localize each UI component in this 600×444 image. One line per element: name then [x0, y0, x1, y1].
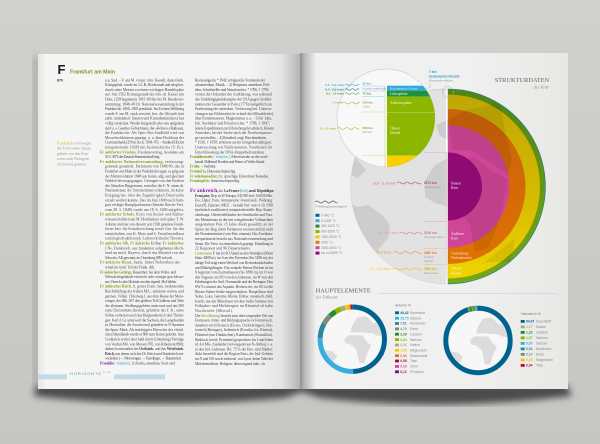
- velocity: inner core: 6371 km: [424, 181, 437, 185]
- text column 1: gen. Karl d. Gr. unterwarf die Sachsen, die Langobarden: [105, 318, 184, 323]
- temperature legend: 600-1500 °C: [321, 230, 340, 234]
- text column 2: ge verschollen. – 4) Rosalind, engl. Biochemikerin,: [195, 136, 267, 141]
- layer: transition zone: [387, 156, 418, 167]
- text column 1: schaft im mittl. Teil der Fränk. Alb.: [105, 266, 155, 270]
- text column 2: Frankoph'ie, französischsprachig.: [190, 179, 240, 183]
- text column 1: vom 28. 3. 1849) wurde am 18. 6. 1849 aufgelöst.: [105, 208, 184, 212]
- text column 2: den Vogesen, im NO von den Ardennen, im W von den: [195, 275, 273, 280]
- text column 2: Senat. Die Verw. ist zentralistisch geprägt. Einteilung in: [195, 242, 273, 246]
- velocity: transition: 2850 km: [424, 267, 437, 271]
- callout: oceanic crust marker: [418, 70, 460, 98]
- margin note: gebiets von den Fran-: [57, 152, 90, 156]
- text column 2: der Premierminister (vom Präs. ernannt). Das Zweikam-: [195, 232, 274, 236]
- text column 2: und Mittelgebirgen. Das zentrale Pariser Becken ist im: [195, 266, 273, 270]
- earth ring labels: Äußerer: [451, 231, 465, 236]
- footer bar: Horizonte: A – G: [103, 370, 110, 374]
- velocity labels upper layers: 3 km/s: [333, 101, 342, 105]
- temperature legend: 3500-4000 °C: [321, 246, 342, 250]
- legend: Anteil: 1,94: [400, 348, 407, 352]
- text column 2: Die Bevölkerung besteht zum überwiegenden Teil aus: [195, 314, 274, 318]
- text column 2: Mittelmeerküste. Religion: überwiegend kath., da: [195, 362, 265, 367]
- velocity labels upper layers: 35 km: [362, 82, 372, 86]
- text column 2: tannien der Gesandter in Paris (1776) maßgeblich zur: [195, 102, 273, 106]
- legend: Anteil: Chlor: [410, 365, 419, 369]
- text column 2: Baskisch (westl. Pyrenäen) gesprochen. Im Land leben: [195, 338, 273, 342]
- layer: continental crust: [387, 86, 427, 91]
- text column 1: Einigung bes. über die Zugehörigkeit Österreichs: [105, 192, 184, 198]
- text column 1: erzielt werden konnte. Das im Juni 1849 nach Stutt-: [105, 198, 185, 202]
- text column 2: Franklinstraße [ˈfræŋklɪn-], Meeresstraße an der nord-: [190, 155, 269, 160]
- velocity labels upper layers: 100 km: [362, 101, 373, 105]
- text column 2: leitete Expeditionen zur Erforschung der arktisch. Küsten: [195, 126, 274, 130]
- legend: Anteil: Titan: [410, 359, 417, 363]
- text column 1: Fr ankfurter Nationalversammlung, verfassung-: [100, 160, 185, 164]
- text column 1: Frankfurt am Main in der Paulskirche tagte; es ging aus: [105, 170, 184, 174]
- velocity: lower mantle: Unterer: [424, 255, 434, 259]
- earth ring labels: Kern: [451, 186, 458, 190]
- legend: Anteil: Magnesium: [410, 348, 427, 352]
- temperature legend: 0-1000 °C: [321, 219, 337, 223]
- right page: [300, 53, 568, 389]
- velocity: lower mantle: Mantel: [424, 259, 433, 263]
- text column 1: Paulskirche; 1866–1945 preußisch. Im Zweiten Weltkrieg: [105, 107, 184, 111]
- text column 2: Frühjahrs- und Herbstregen; im Rhonetal oft kalte: [195, 304, 273, 308]
- legend: Anteil: 49,42: [400, 311, 409, 315]
- left page: [38, 54, 300, 389]
- text column 1: die Span. Mark. Als mächtigster Herrscher des christl.: [105, 328, 184, 332]
- text column 2: Fr äske → Sachsfest.: [190, 165, 216, 169]
- magnifier circle: upper layers: Mantel: [390, 131, 400, 135]
- text column 2: Entschlüsselung der DNA-Doppelhelixstruktur.: [195, 150, 265, 154]
- legend: Anteil: 0,58: [400, 359, 407, 363]
- text column 1: Söhne eroberten auch das Burgunderreich und Thürin-: [105, 314, 185, 318]
- velocity labels upper layers: 8 - 13 km/s: [321, 126, 336, 130]
- earth ring labels: Gutenberg-: [451, 251, 470, 256]
- velocity labels upper layers: Mantel: [362, 130, 372, 134]
- margin note: zosen auch Hexagone: [57, 157, 90, 161]
- text column 1: german. Völker. Chlodwig I. aus dem Hause der Mero-: [105, 294, 185, 298]
- text column 1: soziologisch-philosoph. Lehren (kritische Theorie).: [105, 237, 184, 241]
- text column 1: sind u. a. Goethes Geburtshaus, der »Römer« (Rathaus),: [105, 126, 184, 131]
- text column 2: daneben wird Deutsch (Elsass, Ostlothringen), Bre-: [195, 323, 274, 328]
- text column 1: zum Christentum übertrat, gründete das F. R.; seine: [105, 309, 184, 314]
- text column 2: blanc 4808 m), im S an den Pyrenäen (bis 3298 m); der: [195, 256, 274, 261]
- text column 1: völlig vernichtet. Wieder hergestellt oder neu aufgebaut: [105, 122, 185, 126]
- legend: Volumen: 0,50: [526, 342, 533, 346]
- magnifier circle: upper layers: Asthenosphäre: [390, 101, 412, 105]
- text column 1: Wirtschaftsgebäude ein mehr oder weniger geschlosse-: [105, 275, 185, 279]
- text column 2: Fr ankreich,: [190, 188, 219, 194]
- legend: Anteil: 0,12: [400, 370, 407, 374]
- text column 1: der alemann. Siedlungsgebiete unterwarf und um 500: [105, 304, 184, 308]
- temperature legend: [315, 201, 347, 255]
- layer: lithosphere: [387, 90, 430, 97]
- legend: Volumen: Natrium: [536, 336, 548, 340]
- text column 2: des Ministerrats ist der mit weitgehenden Vollmachten: [195, 218, 273, 222]
- velocity: inner core: [372, 181, 442, 189]
- legend: Anteil: Aluminium: [410, 322, 426, 326]
- footer bar: Horizonte: HORIZONTE: [70, 371, 101, 376]
- text column 1: Franklin [ˈfræŋklɪn], 1) Aretha, amerikan. Soul- und: [100, 362, 175, 366]
- legend: Volumen: 0,04: [526, 364, 533, 368]
- text column 2: Frankol'ia, Haussteuchsprachig.: [190, 170, 236, 174]
- legend: Volumen: 0,53: [526, 347, 533, 351]
- text column 2: * 1920, † 1958; arbeitete an der röntgenkristallograf.: [195, 141, 272, 146]
- velocity labels upper layers: 650 km: [362, 126, 373, 130]
- text column 1: Fr ankfurter Schule, Kreis von Sozial- und Kultur-: [100, 213, 185, 217]
- text column 1: gebende gesamtdt. Parlament von 1848/49, das in: [105, 165, 184, 170]
- section title: Frankfurt am Main: [70, 70, 115, 76]
- text column 1: Fr ankfurter Frieden, Friedensvertrag, beendete am: [100, 150, 184, 155]
- text column 1: winger, der 486–507 den größten Teil Galliens und Teile: [105, 299, 184, 304]
- text column 1: auf. Seit 1562 Krönungsstadt der röm.-dt. Kaiser (im: [105, 93, 184, 97]
- legend: Anteil: 3,39: [400, 332, 407, 336]
- callout: oceanic crust marker: 7 km: [429, 70, 437, 74]
- text column 2: merparlament besteht aus Nationalversammlung und: [195, 237, 273, 241]
- legend: Anteil: 2,64: [400, 338, 407, 342]
- legend: Anteil: Anteil in %: [395, 304, 411, 308]
- text column 1: furter Inst. für Sozialforschung sowie Ges. für das: [105, 227, 184, 231]
- legend: Anteil: 0,19: [400, 365, 407, 369]
- margin note: (Sechseck) genannt.: [57, 162, 87, 166]
- legend: Volumen: Calcium: [536, 331, 548, 335]
- text column 2: Française, Rep. in W-Europa, 543 965 km², 64,056 Mio.: [195, 194, 273, 199]
- text column 2: dicht besiedelt sind die Region Paris, die Ind.-Gebiete: [195, 352, 273, 357]
- text column 2: feucht, nur am Mittelmeer trocken heiße Sommer mit: [195, 299, 274, 304]
- text column 1: der Märzrevolution 1848 aus freien, allg. und gleichen: [105, 174, 184, 179]
- legend: Anteil: Silizium: [410, 316, 422, 320]
- velocity: transition: 8,1 - 13,5 km/s: [369, 267, 391, 271]
- magnifier circle: upper layers: Lithosphäre: [390, 92, 408, 96]
- text column 2: des Unabhängigkeitskampfes der USA gegen Großbri-: [195, 98, 273, 102]
- legend: Anteil: [395, 304, 427, 374]
- donut chart: Anteil: [320, 307, 384, 371]
- text column 1: Reichsbildung des frühen MA.; umfasste weiten, und: [105, 290, 184, 294]
- heading: Strukturdaten: STRUKTURDATEN: [495, 77, 550, 84]
- book shadow: [33, 56, 572, 405]
- legend: Anteil: Sauerstoff: [410, 311, 425, 315]
- text column 2: in den Ind.-Gebieten. Rd. 75 % der Bev. sind Städter;: [195, 347, 273, 351]
- text column 2: [190, 78, 274, 367]
- text column 2: brit. Seefahrer und Polarforscher, * 1786, † 1847;: [195, 122, 270, 126]
- text column 1: zahlr. mittelalterl. Bauten und Kunstdenkmälern) fast: [105, 117, 185, 121]
- earth ring labels: [451, 181, 472, 276]
- text column 1: Reich, aus denen sich das Dt. Reich und Frankreich ent-: [105, 352, 185, 356]
- earth ring labels: Unterer: [451, 267, 463, 271]
- text column 2: Nordwinde (Mistral).: [195, 309, 233, 313]
- earth core rings: [448, 88, 546, 284]
- legend: Anteil: Eisen: [410, 327, 418, 331]
- text column 1: (eingemeindet 1928) mit Justinuskirche (9. Jh.).: [105, 146, 184, 150]
- text column 2: im N und NO sowie südwestl. von Lyon; keine Teile der: [195, 357, 274, 361]
- text column 2: Ew.; Hptst.: Paris. Amtssprache: Französisch. Währung:: [195, 199, 273, 203]
- legend: Anteil: Kalium: [410, 343, 420, 347]
- text column 2: über Kondensatoren, Magnetismus u. a. – 3) Sir John,: [195, 117, 272, 122]
- text column 1: durch seine Messen zu einem wichtigen Handelsplatz: [105, 88, 184, 92]
- legend: Anteil: 0,88: [400, 354, 407, 358]
- text column 1: Wahlen hervorgegangen. Getragen von den Kräften: [105, 179, 184, 183]
- text column 1: Fr änkische Rezat, Saale, linker Nebenfluss des: [100, 261, 180, 266]
- margin note: der Form seines Staats-: [57, 147, 92, 151]
- text column 1: sammlung. 1848–49 Dt. Nationalversammlung in der: [105, 102, 185, 106]
- velocity: lower mantle: 13,5 km/s: [377, 250, 391, 254]
- text column 1: [100, 78, 185, 367]
- magnifier circle: upper layers: Oberer: [390, 127, 401, 131]
- temperature legend: bis zu 5000 °C: [321, 251, 343, 255]
- legend: Volumen: Sauerstoff: [536, 320, 551, 324]
- legend: Volumen: 1,17: [526, 325, 533, 329]
- text column 1: Adorno und das von diesem seit 1930 geleitete Frank-: [105, 222, 185, 226]
- text column 2: Landesnatur F. hat im SO Anteil an den Westalpen (Mont: [195, 251, 274, 255]
- velocity labels upper layers: 6,3 - 8,9 km/s: [325, 88, 344, 92]
- text column 2: Franzosen. Amts- und Bildungssprache ist Französisch,: [195, 319, 273, 324]
- heading: Hauptelemente: der Erdkruste: [316, 295, 338, 300]
- legend: Volumen: Kalium: [536, 325, 546, 329]
- velocity labels upper layers: 5,5 - 6,4 km/s: [325, 83, 344, 87]
- temperature legend: 0-400 °C: [321, 213, 335, 217]
- margin note: [57, 142, 92, 166]
- text column 1: Fr änkisches Reich, lt. genes Franc rum, bedeutendes: [100, 285, 184, 290]
- velocity: outer core: [377, 231, 445, 239]
- text column 2: Amerikas; bei der Suche nach der Nordwestpassa-: [195, 131, 273, 135]
- earth ring labels: Diskontinuität: [451, 256, 472, 260]
- legend: Volumen: Volumen in %: [521, 312, 541, 316]
- donut chart: Volumen: [446, 308, 510, 373]
- velocity: outer core: 7,9 - 10,3 km/s: [377, 231, 399, 235]
- heading: Strukturdaten: [495, 77, 550, 89]
- text column 1: 10. 5. 1871 den Deutsch-Französischen Krieg.: [105, 155, 160, 159]
- globe background: [340, 89, 448, 284]
- text column 2: Erhebungen der Artd. Normandie und der Bretagne. Den: [195, 280, 273, 284]
- velocity labels upper layers: Oben: [362, 105, 370, 109]
- text column 2: tonisch (Bretagne), Italienisch (Korsika, frz. Riviera),: [195, 328, 273, 333]
- velocity: inner core: Festes Eisen: [424, 185, 442, 189]
- text column 1: entwickelten, von K. Marx und S. Freud beeinflusst: [105, 232, 185, 237]
- text column 2: vertrat die Ordenden der Aufklärung, war während: [195, 93, 272, 98]
- text column 1: Schweiz; Alb gewinnt; im Ossenberg 689 m hoch.: [105, 256, 173, 260]
- legend: Anteil: Phosphor: [410, 370, 425, 374]
- heading: Hauptelemente: [316, 288, 557, 300]
- legend: Volumen: [521, 312, 553, 368]
- text column 2: übrige Teil zeigt einen Wechsel von Beckenlandschaften: [195, 261, 273, 265]
- text column 2: 22 Regionen und 96 Départements.: [195, 247, 251, 251]
- heading: Strukturdaten: der Erde: [534, 84, 549, 89]
- text column 2: tiker, Schriftsteller und Naturforscher, * 1706, † 1790;: [195, 88, 269, 93]
- text column 1: dadurch entstanden das Ostfränk. und das Westfränk.: [105, 347, 184, 351]
- legend: Volumen: Titan: [536, 364, 543, 368]
- legend: Volumen: Eisen: [536, 353, 544, 357]
- text column 2: oberhaupt, Oberbefehlshaber der Streitkräfte und Vors.: [195, 213, 273, 218]
- text column 1: wurde F. am M. stark zerstört; bes. die Altstadt (mit: [105, 112, 185, 116]
- text column 2: Flämisch (um Dünkirchen), Katalanisch (Roussillon),: [195, 333, 273, 338]
- velocity labels upper layers: Kontinentalkruste: [362, 87, 387, 91]
- text column 2: Rhone-Saône-Senke eingeschnitten. Hauptflüsse sind: [195, 290, 273, 294]
- text column 1: des liberalen Bürgertums, erstrebte die F. N. einen dt.: [105, 184, 184, 189]
- legend: Volumen: 1,07: [526, 336, 533, 340]
- text column 2: Rockssängerin. * 1942; erfolgreiche Vertreterin der: [195, 78, 266, 82]
- velocity: outer core: Flüssiges Eisen: [424, 235, 445, 239]
- velocity: transition: Permanent: [424, 271, 439, 275]
- text column 1: nes Viereck oder Hofstatt um den eigentl. Hof bilden.: [105, 280, 177, 284]
- text column 2: S begrenzt vom Zentralmassiv (bis 1886 m), im O von: [195, 271, 273, 276]
- velocity: lower mantle: [377, 250, 437, 263]
- temperature legend: 1500-3000 °C: [321, 235, 342, 239]
- legend: Anteil: 2,41: [400, 343, 407, 347]
- legend: Volumen: Silizium: [536, 342, 548, 346]
- temperature legend: P-Wellengeschwindigkeit: [316, 205, 347, 209]
- lower depth lines: [424, 90, 446, 284]
- text column 2: ausgestattete Präs. (5 Jahre direkt gewählt); an der: [195, 223, 274, 227]
- temperature legend: 3000 °C: [321, 240, 334, 244]
- legend: Anteil: 7,51: [400, 322, 407, 326]
- footer bar: Horizonte: [38, 370, 165, 379]
- text column 1: Nationalstaat; ihr Unternehmen scheiterte, da keine: [105, 189, 184, 194]
- text column 2: kanad. Halbinsel Boothia und Prince of Wales Island.: [195, 160, 265, 164]
- text column 2: frz. La France [frãs], amtl. République: [219, 189, 274, 194]
- text column 2: afroamerikan. Musik. – 2) Benjamin, amerikan. Poli-: [195, 83, 271, 88]
- velocity: inner core: 10,6 - 11,4 km/s: [372, 181, 396, 185]
- text column 1: Königspfalz, wurde im 14. Jh. Reichsstadt und stieg bes.: [105, 83, 184, 88]
- earth ring labels: Mantel: [451, 272, 461, 276]
- margin note: Frankreich wird wegen: [57, 142, 91, 146]
- text column 2: rd. 4,4 Mio. Ausländer (vorwiegend aus N-Afrika), v. a.: [195, 343, 273, 348]
- text column 2: (mehrfach modifiziert) semipräsidentielle Rep. Staats-: [195, 208, 274, 212]
- text column 1: gart verlegte Rumpfparlament (liberale Reichs-Verf.: [105, 203, 184, 207]
- text column 2: Seine, Loire, Garonne, Rhone. Klima: ozeanisch, mild,: [195, 295, 273, 300]
- magnifier circle: upper layers: [336, 68, 436, 168]
- velocity labels upper layers: [321, 82, 387, 134]
- heading: Hauptelemente: HAUPTELEMENTE: [316, 288, 371, 295]
- velocity: lower mantle: 2890 km: [424, 251, 437, 255]
- letter heading F: F: [58, 62, 66, 77]
- text column 2: Euro (€). Zeitzone: MEZ. – Gemäß Verf. vom 4. 10. 1958: [195, 203, 273, 207]
- text column 1: in Oberitalien, die Awaren und gründete in N-Spanien: [105, 323, 184, 328]
- layer: asthenosphere and upper mantle: [387, 96, 435, 156]
- text column 1: chen Abendlands wurde er 800 zum Kaiser gekrönt. Sein: [105, 333, 184, 337]
- legend: Anteil: Natrium: [410, 338, 422, 342]
- legend: Anteil: Wasserstoff: [410, 354, 427, 358]
- velocity: outer core: 5150 km: [424, 231, 437, 235]
- text column 1: Dom, 1239 begonnen). 1815–66 Sitz der Dt. Bundesver-: [105, 98, 185, 102]
- velocity labels upper layers: 70 km: [362, 92, 372, 96]
- text column 2: chungen zur Elektrizität (er erfand den Blitzableiter),: [195, 112, 274, 117]
- temperature legend: 300-1200 °C: [321, 224, 340, 228]
- page number: 670: [57, 78, 63, 82]
- legend: Volumen: 94,07: [526, 320, 534, 324]
- text column 1: wissenschaftlern um M. Horkheimer und später T. W.: [105, 218, 184, 222]
- text column 2: Untersuchung von Nukleinsäuren, Vorarbeiten für: [195, 146, 273, 150]
- text column 2: SW F.s nimmt das Aquitan. Becken ein; im SO ist die: [195, 285, 273, 289]
- text column 1: J Ns, Frankreich, aus Juraketten aufgebautes Hoch-: [105, 246, 185, 251]
- text column 1: Großreich zerfiel aber bald durch Erbteilung (Verträge: [105, 338, 184, 342]
- text column 1: Commerzbank (258 m hoch; 1994–97). – Stadtteil Höchst: [105, 141, 185, 145]
- legend: Anteil: 4,70: [400, 327, 407, 331]
- magnifier circle: upper layers: Kontinentale Kruste: [390, 87, 418, 91]
- text column 1: land im mittl. Bayern, durch das Maintal von der: [105, 251, 185, 256]
- legend: Volumen: 0,25: [526, 358, 533, 362]
- text column 1: Messehochhäusern geprägt, u. a. dem Hochhaus der: [105, 136, 185, 141]
- velocity: transition: [369, 267, 439, 275]
- legend: Volumen: Aluminium: [536, 347, 552, 351]
- earth ring labels: Kern: [451, 236, 458, 240]
- legend: Volumen: Magnesium: [536, 358, 553, 362]
- text column 1: wickelten. (→ Merowinger, → Karolinger, → Hausmeier): [105, 357, 182, 362]
- legend: Volumen: 1,23: [526, 331, 533, 335]
- earth ring labels: Innerer: [451, 181, 462, 185]
- legend: Anteil: Calcium: [410, 332, 422, 336]
- velocity labels upper layers: 8,1 - 13 km/s: [326, 92, 344, 96]
- text column 1: Fr änkisches Gebirge, Bauernhof, bei dem Wohn- und: [100, 270, 176, 275]
- text column 1: Fr ankfurter Alb, Fr änkische Erdbar Fr änkischer: [100, 242, 184, 246]
- legend: Anteil: 25,75: [400, 316, 409, 320]
- text column 2: Fr ankokanad|ier, frz. sprachige Einwohner Kanadas.: [190, 174, 269, 178]
- text column 1: u.a. Sud. – F. am M. vorspr. röm. Kastell, dann fränk.: [105, 78, 184, 83]
- text column 2: Spitze der Reg. (dem Parlament verantwortlich) steht: [195, 227, 274, 231]
- callout: oceanic crust marker: ozeanische Kruste: [429, 74, 460, 78]
- legend: Volumen: 0,14: [526, 353, 533, 357]
- text column 1: die Paulskirche. Als Opec-Das Stadtbild wird von: [105, 131, 184, 135]
- text column 2: Erarbeitung der amerikan. Verfassung bei. Untersu-: [195, 107, 273, 111]
- text column 1: von Verdun 843, von Mersen 870, von Ribemont 880);: [105, 342, 184, 347]
- callout: oceanic crust marker: Wasseroberfläche: [429, 78, 453, 82]
